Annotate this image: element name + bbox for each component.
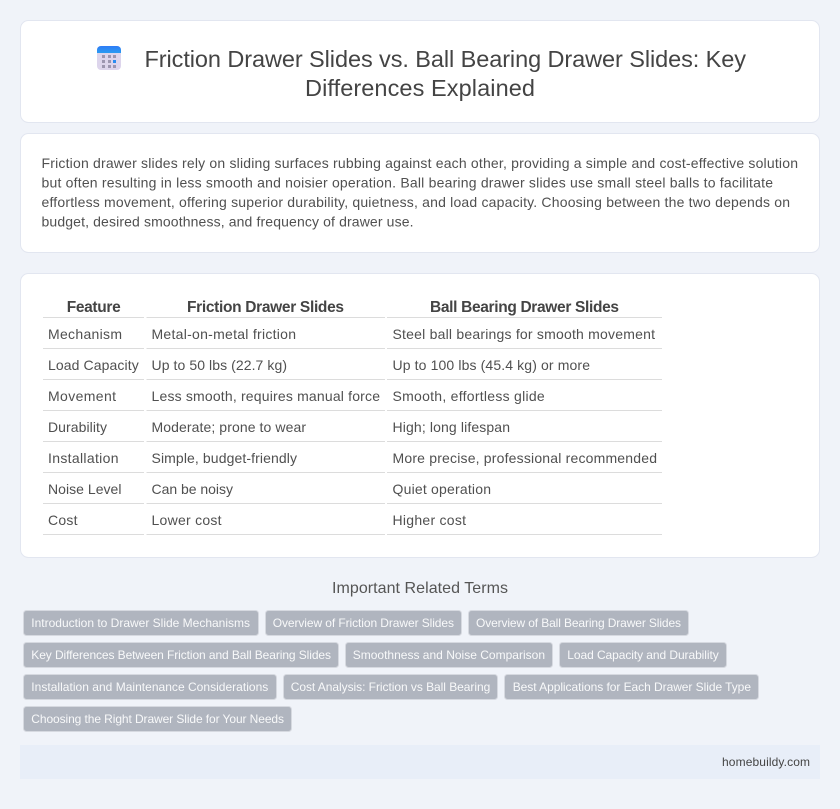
panel: comparison table — [20, 274, 820, 558]
tag — [24, 642, 338, 668]
row: installation: Installation — [48, 450, 118, 466]
table header: Ball Bearing Drawer Slides — [430, 299, 619, 316]
text block: description: but often resulting in less smooth and noisier operation. Ball bearing drawer slides use small steel balls to facilitate — [42, 174, 773, 190]
tag — [24, 674, 276, 700]
tag: Key Differences Between Friction and Ball Bearing Slides — [31, 648, 331, 662]
related term tags — [24, 610, 758, 732]
row: durability: Durability — [48, 419, 107, 435]
row: movement: Movement — [48, 388, 116, 404]
tag — [346, 642, 552, 668]
row: movement: Smooth, effortless glide — [392, 388, 545, 404]
heading: related terms: Important Related Terms — [332, 580, 508, 597]
row: load capacity: Load Capacity — [48, 357, 139, 373]
text block: description: budget, desired smoothness, and frequency of drawer use. — [42, 214, 414, 230]
row: installation: Simple, budget-friendly — [152, 450, 297, 466]
row: cost — [48, 512, 466, 528]
row: load capacity — [48, 357, 590, 373]
tag: Installation and Maintenance Considerations — [31, 680, 268, 694]
text block: description: effortless movement, offering superior durability, quietness, and load capacity. Choosing between the two depends on — [42, 194, 790, 210]
row: durability — [48, 419, 510, 435]
tag: Smoothness and Noise Comparison — [353, 648, 545, 662]
row: load capacity: Up to 100 lbs (45.4 kg) or more — [392, 357, 590, 373]
panel: header — [20, 20, 820, 122]
tag: Best Applications for Each Drawer Slide Type — [513, 680, 751, 694]
row: cost: Cost — [48, 512, 78, 528]
tag: Choosing the Right Drawer Slide for Your Needs — [31, 712, 284, 726]
icon: calendar grid — [97, 46, 121, 70]
footer site name: homebuildy.com — [722, 755, 810, 769]
row: load capacity: Up to 50 lbs (22.7 kg) — [152, 357, 287, 373]
tag — [284, 674, 498, 700]
tag — [504, 674, 758, 700]
tag: Load Capacity and Durability — [567, 648, 719, 662]
row: mechanism — [48, 326, 655, 342]
panel: intro text — [20, 134, 820, 252]
row: durability: Moderate; prone to wear — [152, 419, 306, 435]
table grid lines — [43, 318, 662, 534]
title: Differences Explained — [305, 75, 535, 101]
footer bar — [20, 745, 820, 779]
table header — [67, 299, 619, 316]
row: movement: Less smooth, requires manual force — [152, 388, 380, 404]
row: installation: More precise, professional recommended — [392, 450, 657, 466]
tag — [24, 610, 258, 636]
row: mechanism: Steel ball bearings for smooth movement — [392, 326, 655, 342]
title — [144, 46, 746, 101]
tag — [468, 610, 688, 636]
table header: Friction Drawer Slides — [187, 299, 344, 316]
row: noise level: Quiet operation — [392, 481, 491, 497]
tag — [24, 706, 292, 732]
title: Friction Drawer Slides vs. Ball Bearing Drawer Slides: Key — [144, 46, 746, 72]
table header: Feature — [67, 299, 121, 316]
tag: Overview of Friction Drawer Slides — [273, 616, 454, 630]
row: movement — [48, 388, 545, 404]
tag: Cost Analysis: Friction vs Ball Bearing — [291, 680, 490, 694]
row: noise level — [48, 481, 491, 497]
tag — [560, 642, 726, 668]
row: cost: Lower cost — [152, 512, 222, 528]
row: mechanism: Metal-on-metal friction — [152, 326, 296, 342]
row: durability: High; long lifespan — [392, 419, 510, 435]
row: installation — [48, 450, 657, 466]
tag — [266, 610, 462, 636]
text block: description — [42, 155, 798, 230]
row: cost: Higher cost — [392, 512, 466, 528]
tag: Introduction to Drawer Slide Mechanisms — [31, 616, 250, 630]
row: noise level: Can be noisy — [152, 481, 233, 497]
row: mechanism: Mechanism — [48, 326, 122, 342]
text block: description: Friction drawer slides rely on sliding surfaces rubbing against each other, providing a simple and cost-effective solution — [42, 155, 798, 171]
tag: Overview of Ball Bearing Drawer Slides — [476, 616, 681, 630]
row: noise level: Noise Level — [48, 481, 122, 497]
